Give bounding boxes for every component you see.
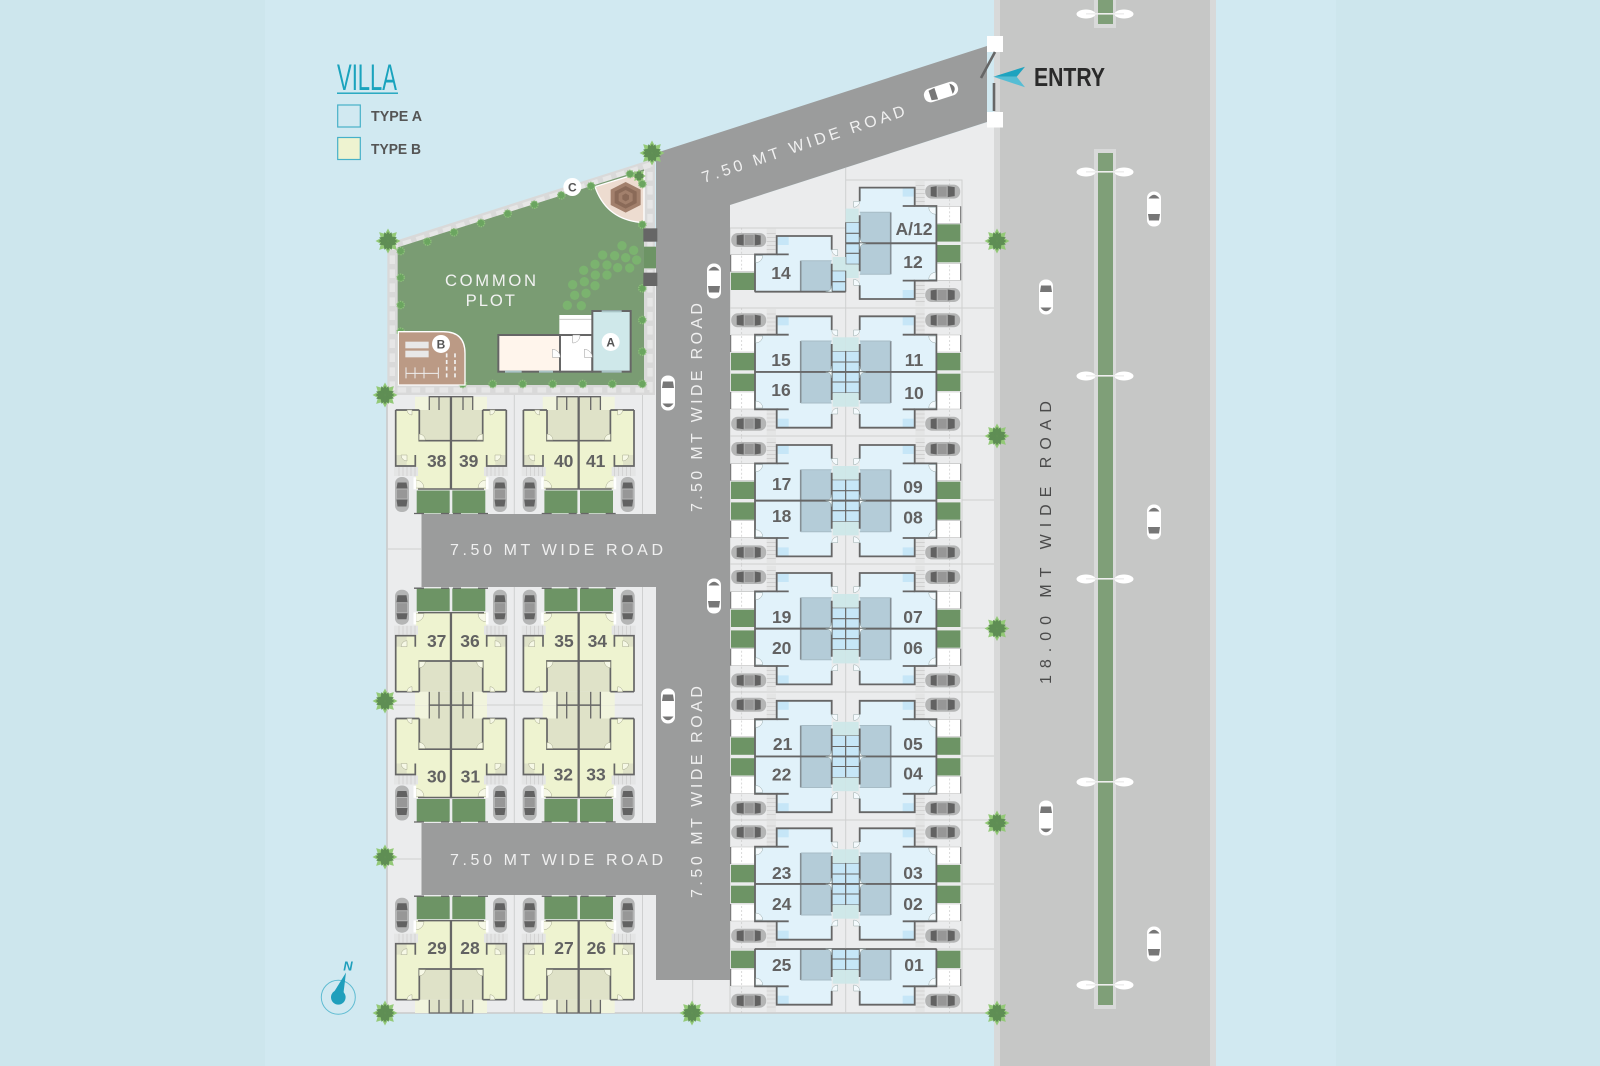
road label: vertical lower: 7.50 MT WIDE ROAD	[689, 686, 706, 898]
play area B	[398, 332, 465, 385]
gazebo area	[595, 172, 644, 223]
block: units 30 31: 31	[461, 766, 480, 786]
block: units A/12 and 12: 12	[903, 252, 923, 272]
block: units 27 26: 26	[587, 938, 606, 958]
block: units 19 20 07 06: 19	[772, 607, 792, 627]
legend title	[337, 57, 398, 98]
block: units 21 22 05 04: 22	[772, 764, 792, 784]
cars on internal roads	[661, 80, 960, 723]
block: units 15 16 11 10: 16	[771, 380, 791, 400]
block: units 23 24 03 02: 23	[772, 863, 792, 883]
block: units 21 22 05 04	[731, 692, 961, 820]
block: units 40 41	[522, 397, 636, 514]
block: units 27 26: 27	[554, 938, 574, 958]
block: units 35 34: 34	[588, 631, 607, 651]
road label: horizontal upper: 7.50 MT WIDE ROAD	[450, 542, 663, 559]
play area B: B	[437, 337, 446, 351]
block: units 15 16 11 10: 10	[904, 383, 924, 403]
block: unit 14: 14	[771, 263, 791, 283]
block: units 37 36: 36	[460, 631, 480, 651]
block: units 19 20 07 06: 20	[772, 638, 792, 658]
block: units 38 39	[394, 397, 508, 514]
block: units 23 24 03 02: 03	[903, 863, 923, 883]
common plot label	[445, 271, 536, 310]
clubhouse: A	[606, 335, 615, 349]
tree cluster	[563, 241, 641, 310]
street lamps	[1076, 10, 1134, 990]
block: units 23 24 03 02: 24	[772, 894, 792, 914]
block: units 40 41: 41	[586, 451, 606, 471]
main 18 m road	[994, 0, 1216, 1066]
label: main road: 18.00 MT WIDE ROAD	[1038, 401, 1055, 684]
block: units 30 31: 30	[427, 766, 447, 786]
block: units 15 16 11 10: 11	[905, 350, 924, 370]
legend title: VILLA	[337, 57, 397, 98]
block: units 32 33: 32	[554, 764, 573, 784]
cars on main road	[1039, 192, 1161, 962]
block: units 25 01	[731, 949, 961, 1013]
road label: diagonal: 7.50 MT WIDE ROAD	[700, 103, 907, 187]
block: units 15 16 11 10	[731, 308, 961, 436]
entry label: ENTRY	[1034, 64, 1105, 92]
block: units 21 22 05 04: 05	[903, 734, 923, 754]
block: units 30 31	[394, 705, 508, 822]
entry arrow	[993, 67, 1025, 87]
panel: common plot	[387, 158, 657, 395]
block: units 29 28: 28	[460, 938, 480, 958]
block: units A/12 and 12	[846, 179, 961, 307]
median upper	[1094, 0, 1116, 28]
common plot label: PLOT	[466, 291, 515, 310]
road label: horizontal lower: 7.50 MT WIDE ROAD	[450, 852, 663, 869]
block: units 21 22 05 04: 21	[773, 734, 793, 754]
median lower	[1094, 149, 1116, 1009]
block: units 25 01: 01	[904, 955, 924, 975]
entry gate	[981, 36, 1003, 128]
block: units 38 39: 38	[427, 451, 447, 471]
block: units 19 20 07 06: 07	[903, 607, 923, 627]
block: units 38 39: 39	[459, 451, 479, 471]
common plot label: COMMON	[445, 271, 536, 290]
legend: type B: TYPE B	[371, 142, 421, 158]
legend: type A: TYPE A	[371, 109, 423, 125]
legend: type A	[338, 105, 423, 127]
compass	[321, 958, 355, 1014]
block: unit 14	[731, 228, 846, 292]
block: units 17 18 09 08: 09	[903, 477, 923, 497]
shrubs	[397, 170, 646, 388]
road label: vertical upper: 7.50 MT WIDE ROAD	[689, 303, 706, 512]
block: units 27 26	[522, 896, 636, 1013]
legend: type B	[338, 138, 421, 160]
block: units 17 18 09 08: 17	[772, 474, 791, 494]
marker C: C	[568, 180, 577, 194]
gate openings	[643, 228, 657, 286]
compass: N	[343, 958, 353, 974]
block: units 40 41: 40	[554, 451, 574, 471]
block: units 17 18 09 08	[731, 437, 961, 565]
block: units 32 33	[522, 705, 636, 822]
block: units 23 24 03 02: 02	[903, 894, 923, 914]
clubhouse	[498, 310, 631, 373]
marker C	[563, 178, 581, 196]
block: units 15 16 11 10: 15	[771, 350, 791, 370]
palm trees	[372, 140, 1010, 1026]
block: units A/12 and 12: A/12	[896, 219, 933, 239]
internal roads	[422, 46, 987, 980]
block: units 25 01: 25	[772, 955, 792, 975]
block: units 35 34: 35	[554, 631, 574, 651]
block: units 19 20 07 06	[731, 565, 961, 693]
block: units 29 28: 29	[427, 938, 447, 958]
block: units 17 18 09 08: 08	[903, 508, 923, 528]
block: units 32 33: 33	[586, 764, 606, 784]
block: units 37 36	[394, 588, 508, 705]
site ground	[387, 120, 994, 1013]
block: units 29 28	[394, 896, 508, 1013]
block: units 19 20 07 06: 06	[903, 638, 923, 658]
block: units 35 34	[522, 588, 636, 705]
block: units 23 24 03 02	[731, 820, 961, 948]
block: units 17 18 09 08: 18	[772, 506, 792, 526]
block: units 37 36: 37	[427, 631, 446, 651]
block: units 21 22 05 04: 04	[903, 764, 923, 784]
